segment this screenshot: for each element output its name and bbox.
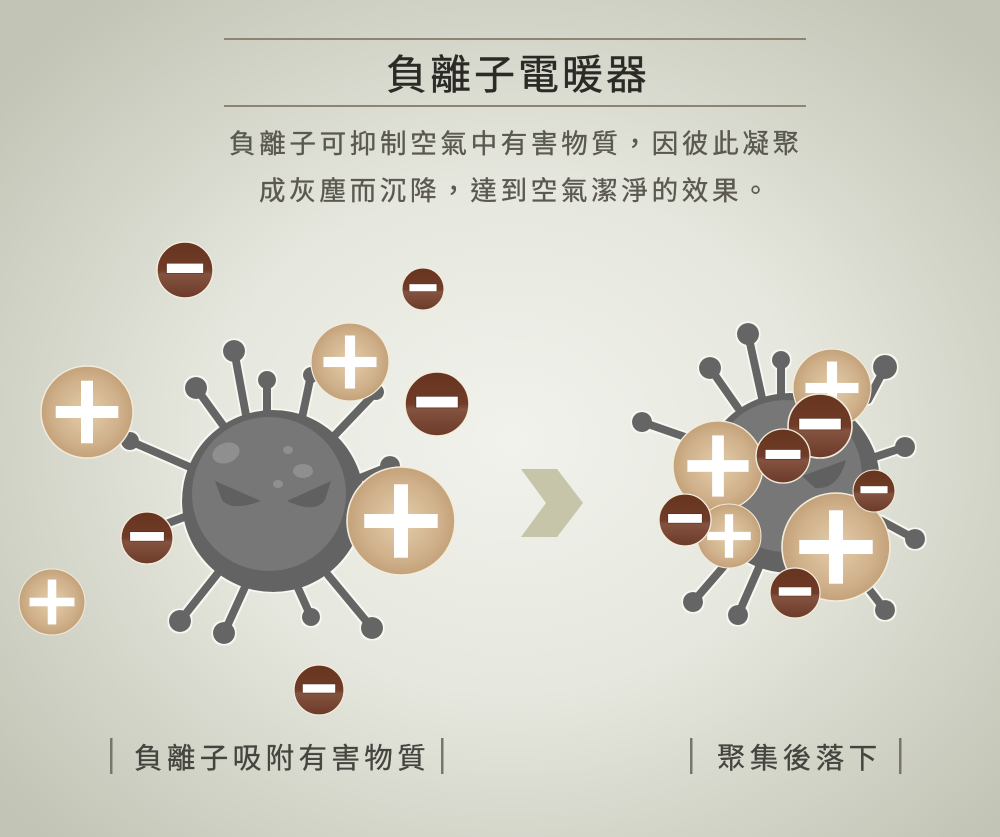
negative charge [853, 470, 895, 512]
left virus [121, 340, 400, 644]
positive charge [347, 467, 455, 575]
title block: 負離子電暖器 [386, 52, 650, 98]
positive charge [19, 569, 85, 635]
description text: 成灰塵而沉降，達到空氣潔淨的效果。 [259, 176, 772, 206]
negative charge [294, 665, 344, 715]
negative charge [770, 568, 820, 618]
negative charge [402, 268, 444, 310]
left charges [19, 242, 469, 715]
positive charge [41, 366, 133, 458]
description text [229, 129, 803, 206]
positive charge [311, 323, 389, 401]
negative charge [157, 242, 213, 298]
right caption: 聚集後落下 [717, 743, 882, 775]
positive charge [673, 421, 763, 511]
description text: 負離子可抑制空氣中有害物質，因彼此凝聚 [229, 129, 803, 159]
left caption: 負離子吸附有害物質 [134, 743, 430, 775]
negative charge [788, 394, 852, 458]
positive charge [782, 493, 890, 601]
negative charge [405, 372, 469, 436]
right charges [659, 349, 895, 618]
negative charge [659, 494, 711, 546]
arrow [521, 469, 583, 537]
negative charge [121, 512, 173, 564]
positive charge [697, 504, 761, 568]
right virus [632, 323, 925, 625]
positive charge [793, 349, 871, 427]
negative charge [756, 429, 810, 483]
